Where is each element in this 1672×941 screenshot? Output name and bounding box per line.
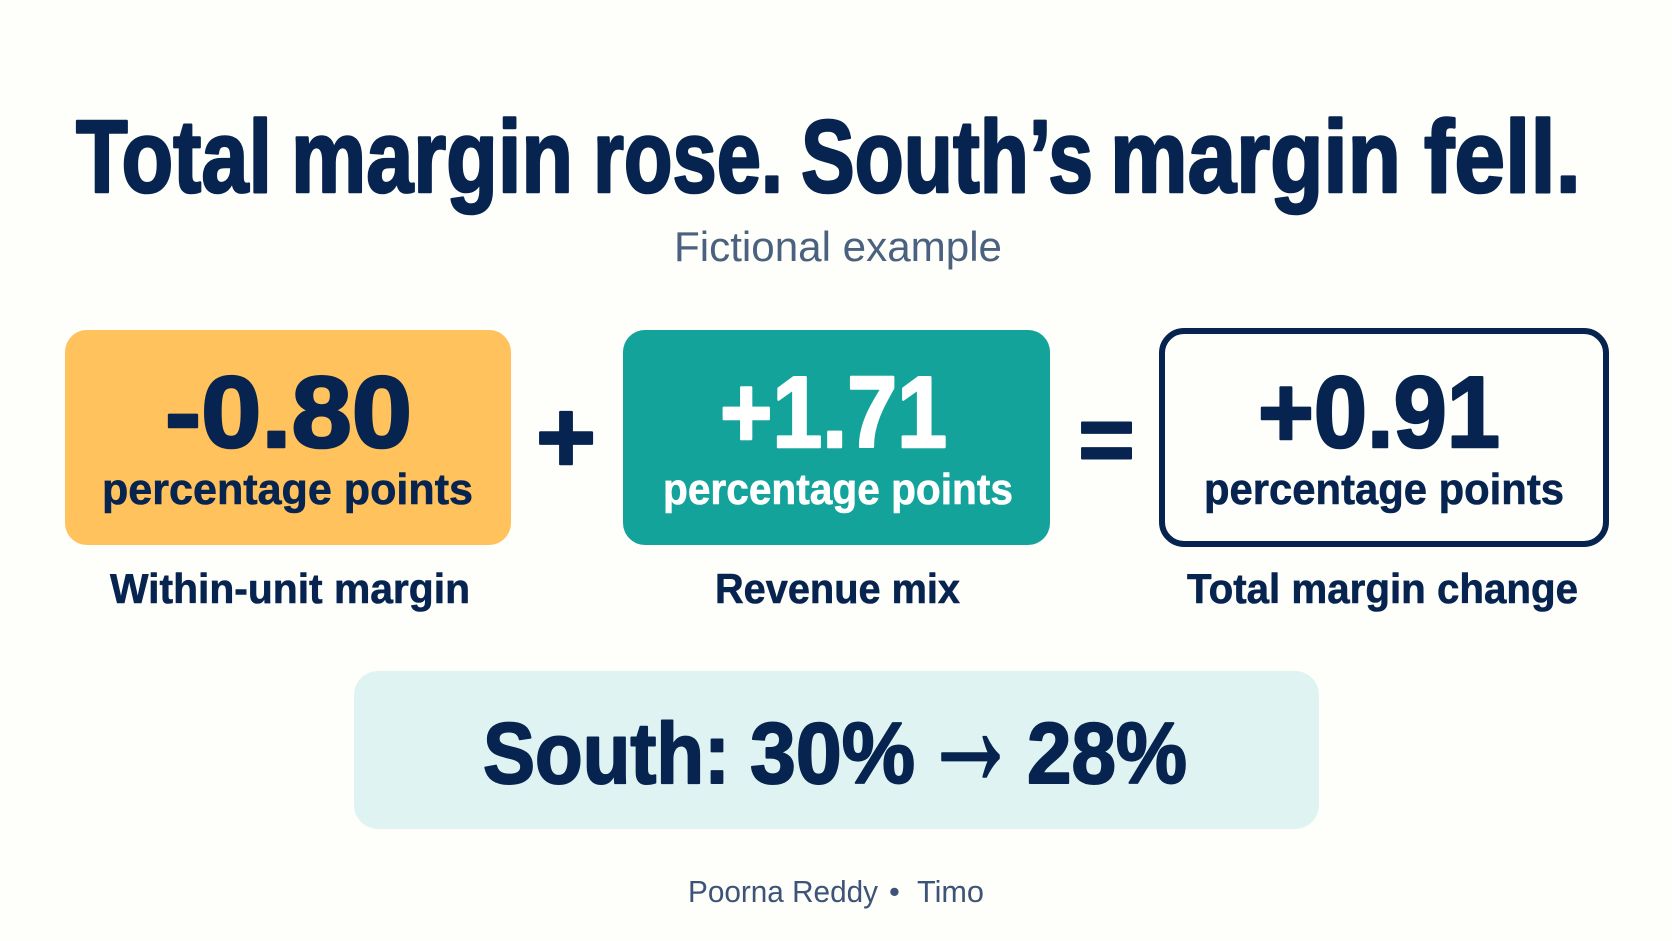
orange card [65,330,511,545]
label: total margin change: Total margin change [1187,565,1578,612]
unit: percentage points: percentage points [102,465,473,514]
title: margin [1110,99,1401,214]
title: South’s [801,99,1093,214]
title [76,99,1581,214]
footer credit [688,874,984,909]
label: within-unit margin: Within-unit margin [110,565,470,612]
value: +0.91: +0.91 [1258,357,1500,469]
subtitle: Fictional example [674,223,1002,270]
panel: within-unit margin [65,330,511,612]
panel: total margin change [1162,331,1606,612]
callout text: South: [483,706,730,802]
unit: percentage points: percentage points [1204,465,1564,514]
callout text [483,632,1187,822]
callout text: 30% [750,706,915,802]
operator: plus: + [536,380,596,494]
panel: revenue mix [623,330,1050,612]
value: +1.71: +1.71 [720,357,947,469]
title: rose. [593,99,783,214]
footer credit: Poorna Reddy [688,874,878,909]
title: Total [76,99,272,214]
operator: equals: = [1078,386,1135,493]
teal card [623,330,1050,545]
title: fell. [1424,99,1581,214]
callout text: 28% [1027,706,1187,802]
title: margin [291,99,573,214]
panel: South callout [354,632,1319,829]
callout background [354,671,1319,829]
value: -0.80: -0.80 [165,357,412,469]
footer credit: • [889,874,900,909]
callout text: → [922,632,1019,822]
footer credit: Timo [917,874,984,909]
label: revenue mix: Revenue mix [715,565,961,612]
unit: percentage points: percentage points [663,465,1013,514]
outlined card [1162,331,1606,544]
